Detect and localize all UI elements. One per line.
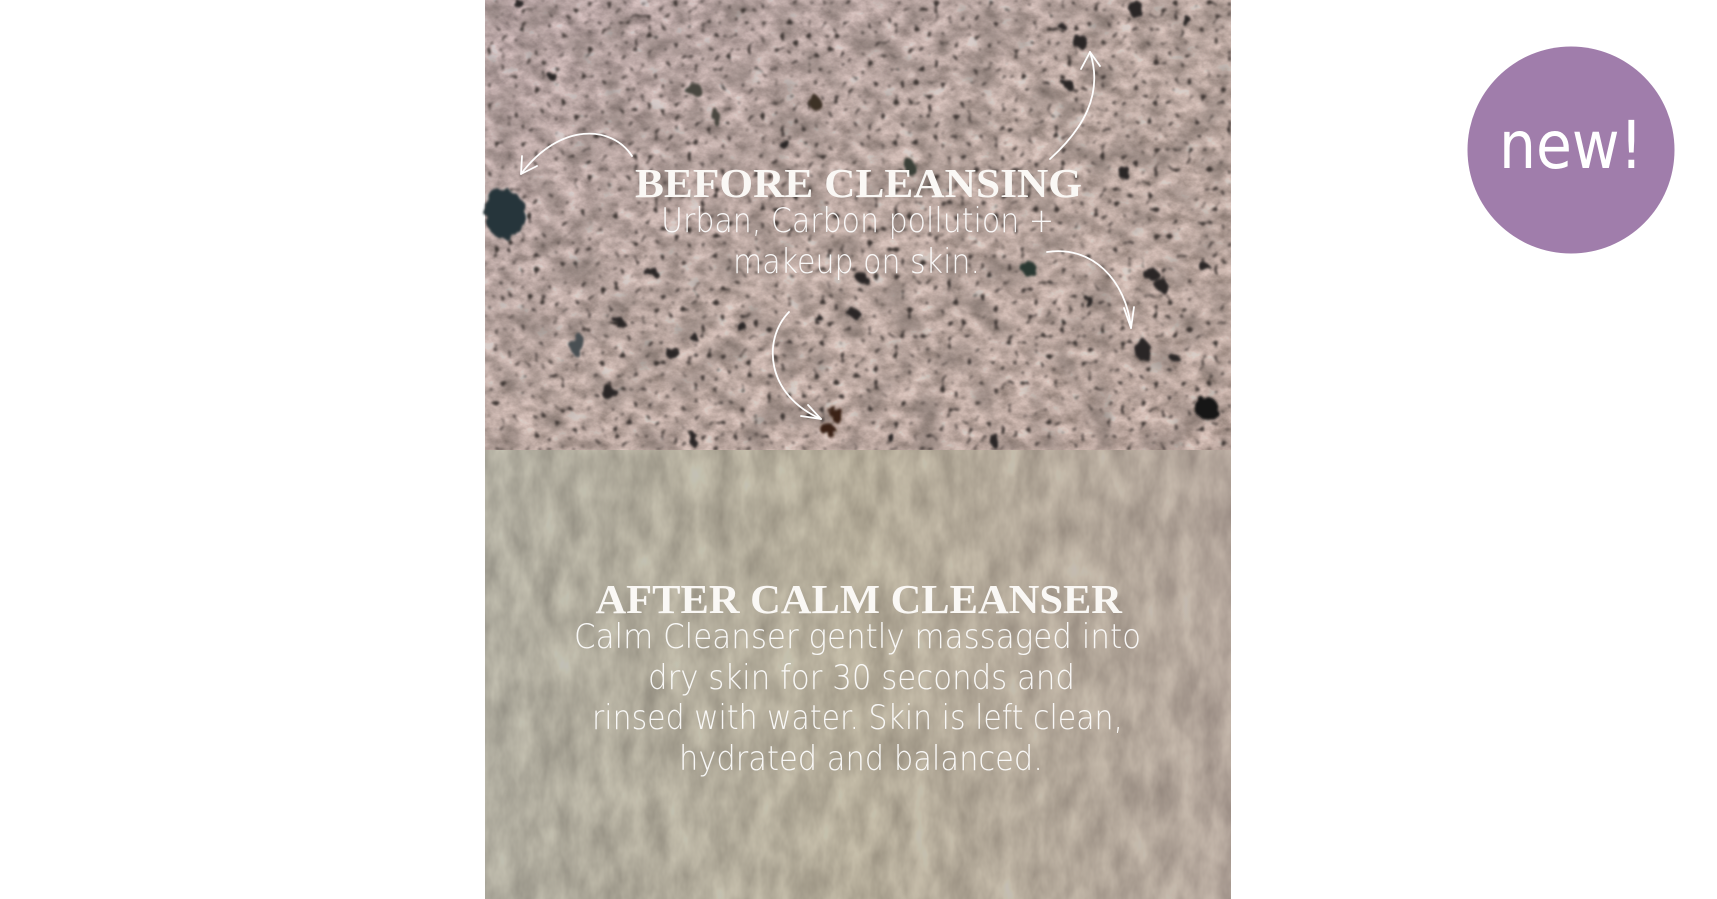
heading: before cleansing: BEFORE CLEANSING: [635, 160, 1082, 206]
panel: before cleansing: [485, 0, 1231, 450]
arrow: lower right: [1047, 251, 1134, 328]
text: before description: Urban, Carbon pollution +: [661, 201, 1054, 241]
heading: after calm cleanser: AFTER CALM CLEANSER: [596, 576, 1122, 622]
badge: new: new!: [1499, 107, 1643, 184]
text: after description: rinsed with water. Skin is left clean,: [592, 698, 1123, 738]
pollution particles: [485, 0, 1218, 447]
arrow: lower centre: [773, 312, 821, 419]
skin texture: clean skin: [485, 450, 1231, 899]
text: after description: [574, 617, 1141, 779]
text: after description: hydrated and balanced.: [679, 739, 1043, 779]
text: after description: Calm Cleanser gently massaged into: [574, 617, 1141, 657]
text: before description: [661, 201, 1054, 282]
text: before description: makeup on skin.: [733, 242, 980, 282]
text: after description: dry skin for 30 seconds and: [648, 658, 1075, 698]
skin texture: polluted skin: [485, 0, 1231, 450]
arrow: upper left: [521, 134, 632, 174]
panel: after calm cleanser: [485, 450, 1231, 899]
badge: new: [1468, 46, 1674, 254]
arrow: upper right: [1050, 52, 1100, 159]
